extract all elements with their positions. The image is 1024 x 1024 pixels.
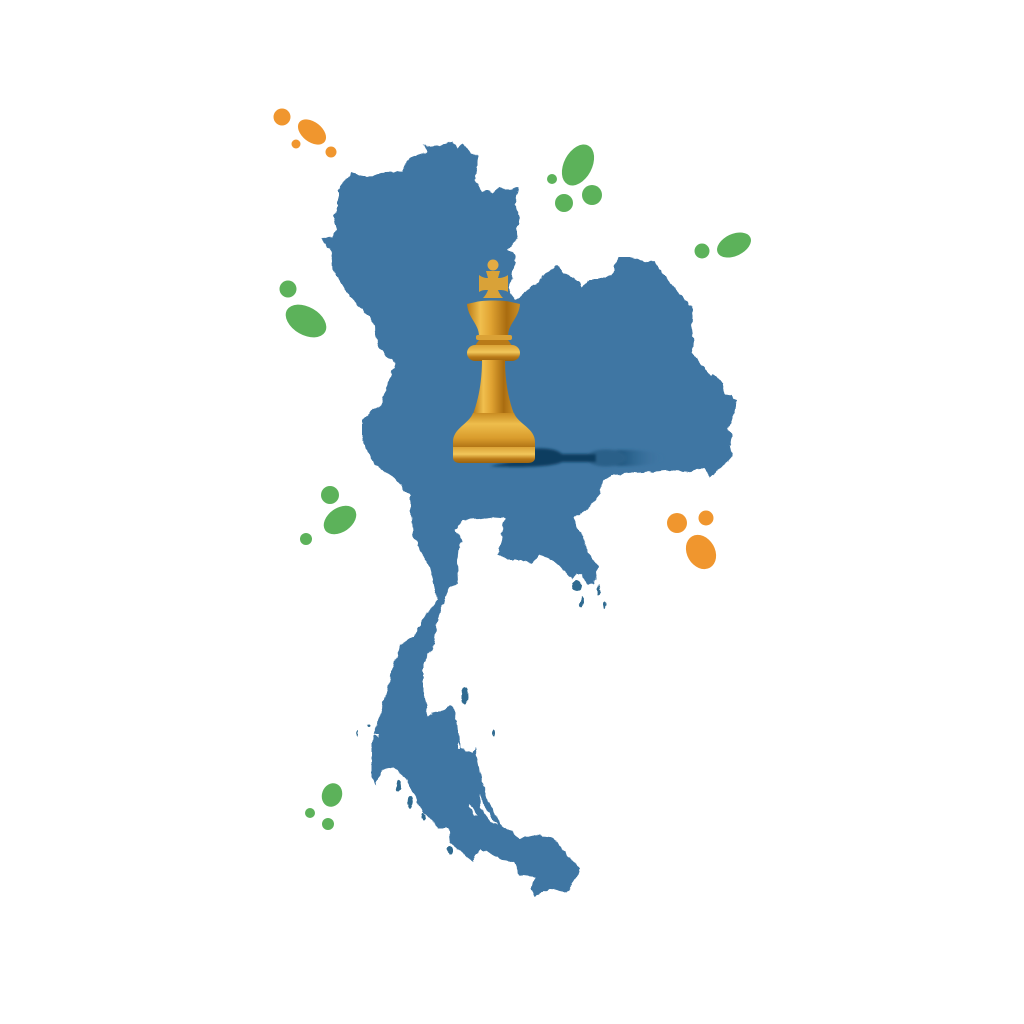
map: Thailand silhouette [322, 140, 737, 897]
decoration: orange dots right [667, 510, 722, 575]
king: finial ball [488, 260, 498, 270]
map: islands [357, 581, 606, 855]
king: base ring [453, 447, 535, 463]
king: stem [473, 360, 514, 414]
shadow: chess king cast shadow [490, 448, 665, 467]
king: domed base [453, 413, 535, 449]
king: bulge ring [467, 345, 520, 361]
decoration: green dots left [280, 280, 332, 344]
icon: golden chess king [453, 260, 535, 463]
decoration: green dots top centre [547, 139, 602, 212]
decoration: orange dots top left [274, 108, 336, 158]
king: cross [479, 271, 508, 298]
map: inland water gaps [373, 735, 497, 825]
king: collar [476, 335, 512, 340]
king: crown [467, 300, 520, 336]
decoration: green dots lower left [300, 486, 362, 545]
map: mainland and peninsula outline [322, 140, 737, 897]
decoration: green dots bottom left [305, 780, 346, 830]
decoration: green dots top right [694, 227, 755, 263]
